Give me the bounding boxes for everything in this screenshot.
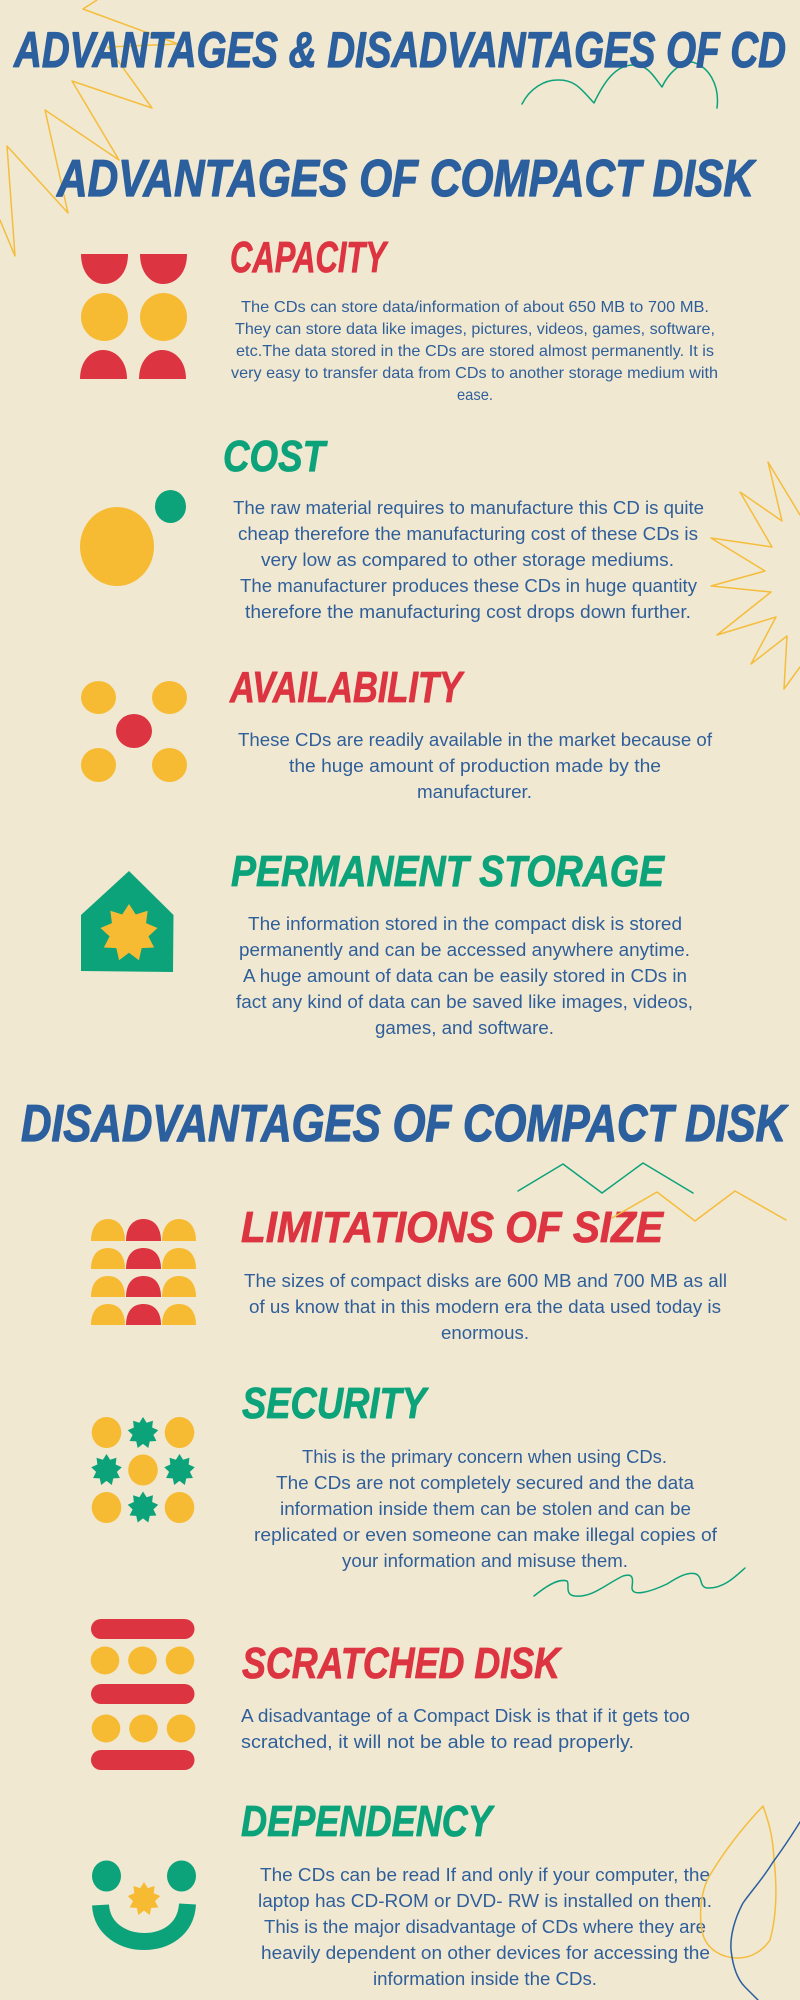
icon: bars and dots	[91, 1619, 195, 1770]
text: scratched disk description: scratched, it will not be able to read properly.	[241, 1732, 634, 1752]
text: permanent storage description: A huge amount of data can be easily stored in CDs in	[243, 966, 687, 986]
heading: scratched disk: SCRATCHED DISK	[242, 1639, 563, 1688]
text: dependency description: This is the major disadvantage of CDs where they are	[264, 1917, 706, 1937]
text: cost description: The manufacturer produces these CDs in huge quantity	[240, 576, 697, 596]
panel: availability	[81, 663, 713, 802]
text: capacity description: The CDs can store data/information of about 650 MB to 700 MB.	[241, 299, 709, 316]
decoration: green arcs top right	[522, 62, 717, 108]
text: availability description	[238, 730, 713, 802]
text: permanent storage description	[236, 914, 693, 1038]
icon: house with star	[81, 871, 174, 972]
panel: cost	[80, 432, 704, 622]
text: cost description: cheap therefore the manufacturing cost of these CDs is	[238, 524, 698, 544]
heading: availability: AVAILABILITY	[229, 663, 465, 712]
panel: capacity	[80, 233, 718, 404]
text: cost description	[233, 498, 704, 622]
heading: cost: COST	[223, 432, 328, 481]
text: limitations description: enormous.	[441, 1323, 529, 1343]
text: security description: your information and misuse them.	[342, 1551, 628, 1571]
panel: permanent storage	[81, 847, 693, 1038]
text: capacity description: ease.	[457, 387, 493, 404]
panel: limitations of size	[91, 1203, 727, 1343]
icon: capacity half circles and ovals	[80, 254, 187, 379]
panel: security	[91, 1379, 718, 1571]
text: dependency description: heavily dependent on other devices for accessing the	[261, 1943, 710, 1963]
text: cost description: very low as compared to other storage mediums.	[261, 550, 674, 570]
text: security description: The CDs are not completely secured and the data	[276, 1473, 695, 1493]
text: availability description: the huge amount of production made by the	[289, 756, 661, 776]
text: capacity description: They can store data like images, pictures, videos, games, software,	[235, 321, 715, 338]
heading: limitations of size: LIMITATIONS OF SIZE	[241, 1203, 665, 1252]
text: limitations description: The sizes of compact disks are 600 MB and 700 MB as all	[244, 1271, 727, 1291]
text: capacity description: etc.The data stored in the CDs are stored almost permanently. It is	[236, 343, 714, 360]
text: limitations description	[244, 1271, 727, 1343]
text: permanent storage description: games, and software.	[375, 1018, 554, 1038]
heading: dependency: DEPENDENCY	[241, 1797, 495, 1846]
heading: security: SECURITY	[242, 1379, 429, 1428]
text: permanent storage description: permanently and can be accessed anywhere anytime.	[239, 940, 690, 960]
decoration: yellow zigzag top left	[0, 0, 178, 256]
icon: rows of domes	[91, 1219, 196, 1325]
panel: dependency	[92, 1797, 712, 1989]
text: permanent storage description: fact any kind of data can be saved like images, videos,	[236, 992, 693, 1012]
text: scratched disk description	[241, 1706, 690, 1752]
heading: permanent storage: PERMANENT STORAGE	[231, 847, 665, 896]
text: cost description: The raw material requires to manufacture this CD is quite	[233, 498, 704, 518]
text: cost description: therefore the manufacturing cost drops down further.	[245, 602, 691, 622]
text: availability description: These CDs are readily available in the market because of	[238, 730, 713, 750]
decoration: yellow teardrop outline	[701, 1806, 776, 1958]
panel: scratched disk	[91, 1619, 690, 1770]
text: limitations description: of us know that in this modern era the data used today is	[249, 1297, 721, 1317]
text: security description: This is the primary concern when using CDs.	[302, 1447, 667, 1467]
decoration: yellow mountains	[612, 1191, 786, 1221]
decoration: green squiggle	[534, 1568, 745, 1596]
text: dependency description	[258, 1865, 712, 1989]
text: dependency description: The CDs can be read If and only if your computer, the	[260, 1865, 710, 1885]
text: availability description: manufacturer.	[417, 782, 532, 802]
text: capacity description	[231, 299, 718, 404]
heading: capacity: CAPACITY	[230, 233, 389, 282]
decoration: yellow starburst right	[711, 462, 800, 689]
decoration: blue curve	[731, 1822, 800, 2000]
text: capacity description: very easy to transfer data from CDs to another storage medium with	[231, 365, 718, 382]
text: dependency description: information inside the CDs.	[373, 1969, 597, 1989]
text: scratched disk description: A disadvantage of a Compact Disk is that if it gets too	[241, 1706, 690, 1726]
text: security description	[254, 1447, 718, 1571]
icon: cost circles	[80, 490, 186, 586]
text: security description: replicated or even someone can make illegal copies of	[254, 1525, 718, 1545]
icon: availability dots	[81, 681, 187, 782]
text: dependency description: laptop has CD-ROM or DVD- RW is installed on them.	[258, 1891, 712, 1911]
icon: smiley face	[92, 1860, 196, 1942]
decoration: green mountains	[518, 1163, 693, 1193]
text: security description: information inside them can be stolen and can be	[280, 1499, 691, 1519]
icon: ovals and stars grid	[91, 1417, 195, 1523]
text: permanent storage description: The information stored in the compact disk is stored	[248, 914, 682, 934]
